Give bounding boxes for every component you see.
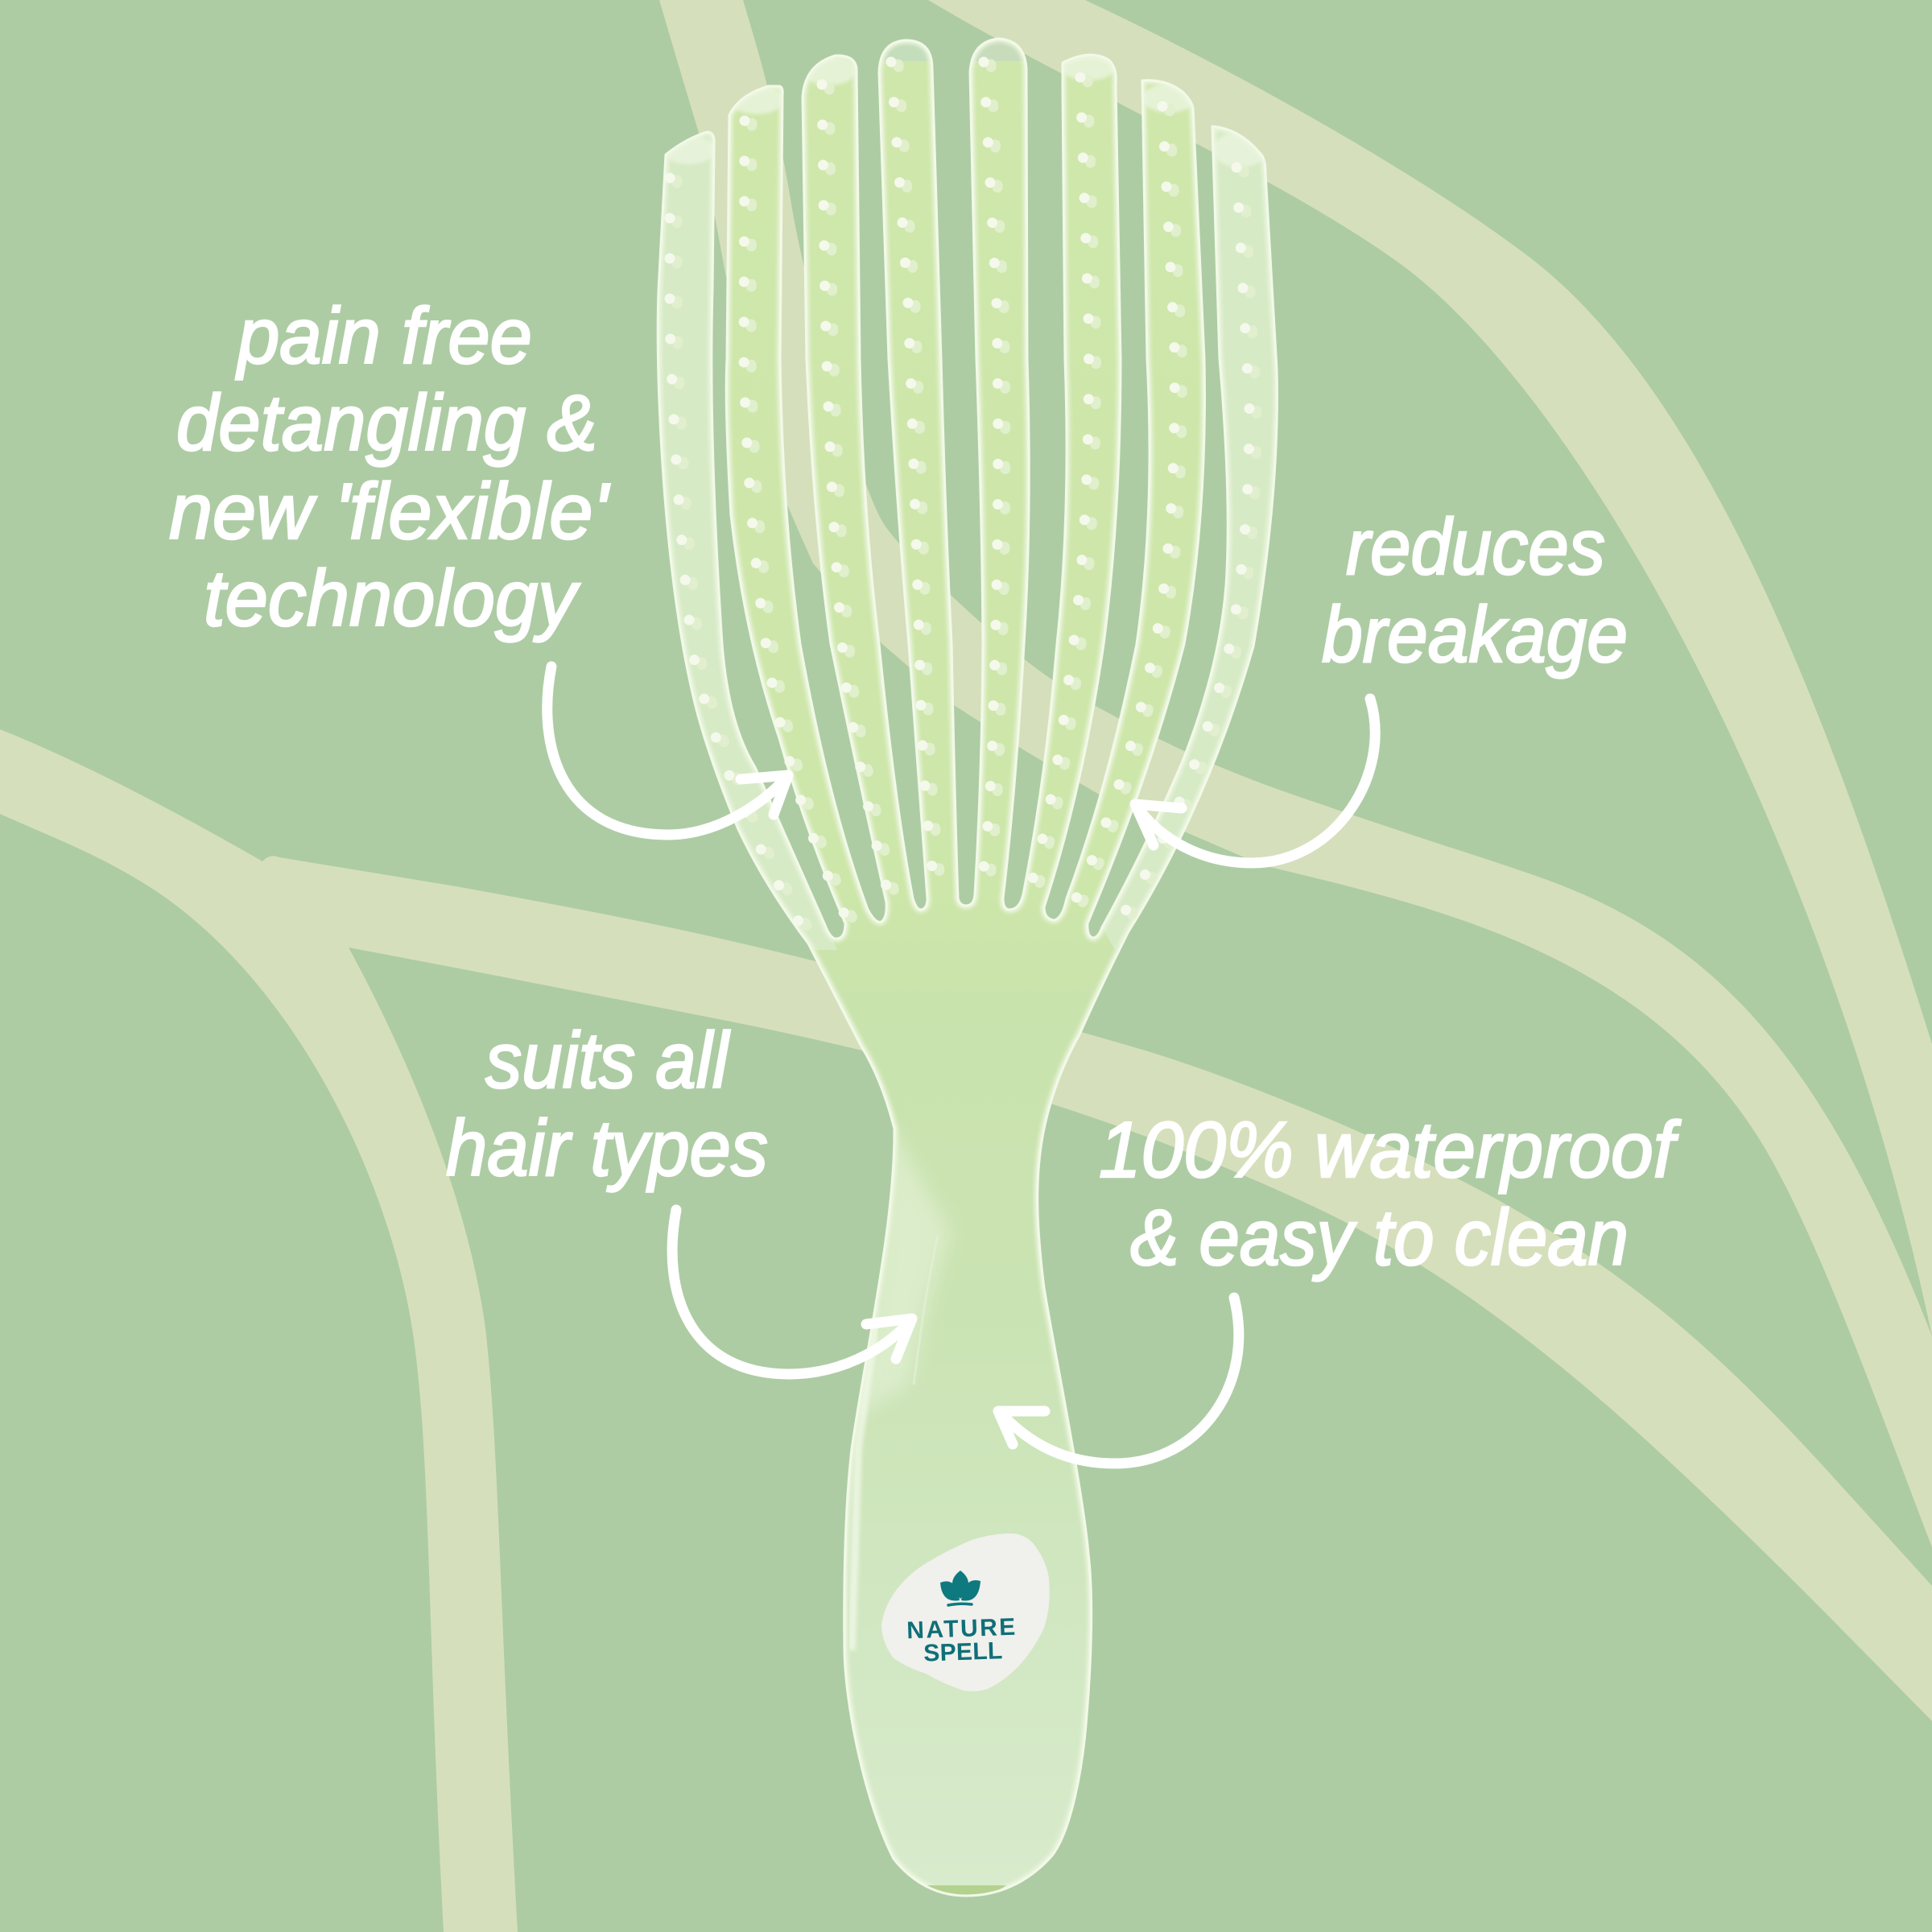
bristles tooth 4 xyxy=(891,62,943,899)
arrow: to handle from waterproof callout xyxy=(998,1298,1239,1463)
callout: reduces breakage: breakage xyxy=(1322,590,1628,679)
brush body with teeth, palm and handle xyxy=(658,39,1277,1897)
icon: three leaves logo xyxy=(940,1571,980,1605)
callout: suits all hair types: suits all xyxy=(485,1016,730,1104)
brand name xyxy=(906,1614,1017,1667)
callout: pain free detangling: pain free xyxy=(235,291,532,380)
arrow: to handle from suits all hair types callout xyxy=(672,1210,912,1374)
callout: pain free detangling: technology xyxy=(204,554,580,642)
arrow: to teeth from reduces breakage callout xyxy=(1135,699,1375,863)
bristles tooth 8 xyxy=(1108,167,1257,942)
arrow: to teeth from pain free callout xyxy=(547,667,788,835)
callout: waterproof and easy to clean xyxy=(1099,1105,1681,1282)
bristles tooth 6 xyxy=(1026,77,1096,907)
bristles tooth 1 xyxy=(670,178,815,940)
brand sticker xyxy=(881,1534,1050,1691)
bristles tooth 2 xyxy=(744,121,854,922)
bristles tooth 7 xyxy=(1067,106,1182,922)
brush product xyxy=(658,39,1277,1897)
callout: pain free detangling xyxy=(169,291,610,642)
callout: pain free detangling: new 'flexible' xyxy=(169,467,610,555)
callout: suits all hair types xyxy=(446,1016,768,1192)
callout: reduces breakage: reduces xyxy=(1346,502,1605,591)
bristles tooth 3 xyxy=(822,85,898,905)
bristles tooth 5 xyxy=(980,62,1005,899)
callout: waterproof and easy to clean: 100% waterproof xyxy=(1099,1105,1681,1194)
brand name: SPELL xyxy=(923,1637,1003,1667)
callout: waterproof and easy to clean: & easy to clean xyxy=(1130,1193,1629,1282)
callout: reduces breakage xyxy=(1322,502,1628,679)
callout: suits all hair types: hair types xyxy=(446,1104,768,1192)
brand name: NATURE xyxy=(906,1614,1016,1644)
callout: pain free detangling: detangling & xyxy=(176,378,597,467)
